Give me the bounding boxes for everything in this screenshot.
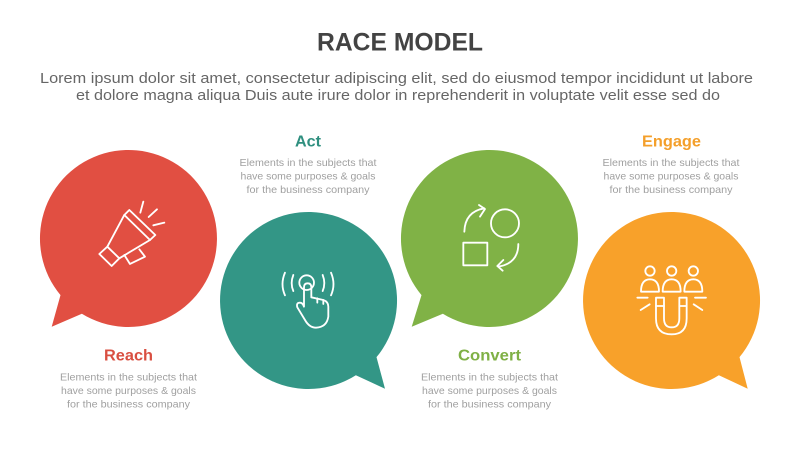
intro text [40,70,753,104]
engage description: have some purposes & goals [604,170,738,182]
convert heading: Convert [458,348,522,364]
title: RACE MODEL [317,28,483,56]
convert description: for the business company [428,398,552,410]
act description: for the business company [246,184,370,196]
convert description [421,372,558,410]
reach heading: Reach [104,348,153,364]
act description [240,157,377,196]
intro text: Lorem ipsum dolor sit amet, consectetur adipiscing elit, sed do eiusmod tempor incididunt ut labore [40,70,753,87]
engage description: for the business company [610,184,733,196]
reach description [60,372,197,410]
panel: reach [40,150,217,410]
icon: shapes and arrows [463,205,519,271]
engage description [602,157,740,196]
panel: convert [401,150,578,410]
act description: have some purposes & goals [240,170,376,182]
icon: tapping hand [282,273,333,328]
reach description: have some purposes & goals [61,385,196,397]
act speech bubble [220,212,397,389]
convert speech bubble [401,150,578,327]
engage heading: Engage [642,134,701,150]
convert description: have some purposes & goals [422,385,557,397]
icon: megaphone [99,202,164,266]
engage speech bubble [583,212,760,389]
icon: magnet attracting people [637,266,706,334]
act description: Elements in the subjects that [240,157,377,169]
convert description: Elements in the subjects that [421,372,558,384]
intro text: et dolore magna aliqua Duis aute irure dolor in reprehenderit in voluptate velit esse sed do [76,87,720,104]
engage description: Elements in the subjects that [602,157,740,169]
reach description: Elements in the subjects that [60,372,197,384]
reach description: for the business company [67,398,191,410]
act heading: Act [295,134,322,150]
panel: act [220,134,397,389]
reach speech bubble [40,150,217,327]
panel: engage [583,134,760,389]
